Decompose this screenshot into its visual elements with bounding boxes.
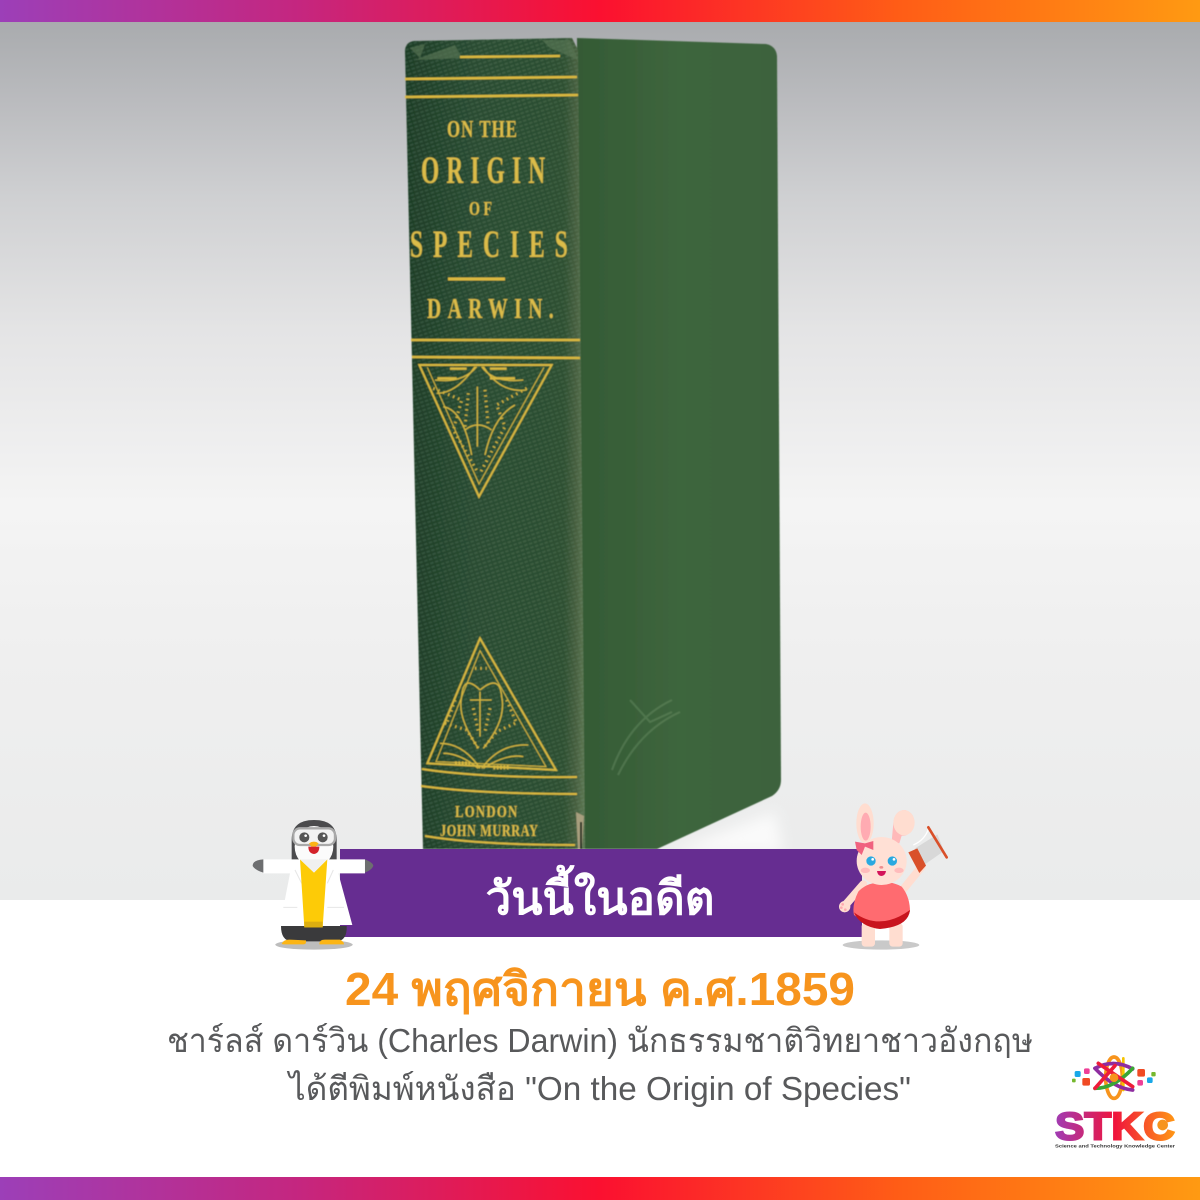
STKC logo — [1055, 1057, 1175, 1150]
description text — [167, 1022, 1033, 1107]
spine title text: OF — [469, 198, 492, 220]
banner title: วันนี้ในอดีต — [486, 864, 714, 924]
torn spine detail — [576, 812, 584, 849]
rabbit mascot with megaphone — [839, 803, 947, 950]
white lower panel — [0, 900, 1200, 1177]
gold triangle ornament top — [419, 365, 552, 497]
top gradient bar — [0, 0, 1200, 22]
spine title text: SPECIES — [410, 222, 568, 265]
spine title text: ON THE — [447, 117, 517, 143]
book: On the Origin of Species — [405, 38, 781, 849]
atom icon — [1095, 1057, 1133, 1098]
spine title text: ORIGIN — [421, 148, 545, 191]
embossed ornament on cover — [612, 700, 680, 775]
gold rules — [405, 56, 580, 845]
book spine — [405, 38, 585, 849]
bottom gradient bar — [0, 1177, 1200, 1200]
book cover side — [577, 38, 781, 849]
logo tagline: Science and Technology Knowledge Center — [1055, 1144, 1175, 1150]
spine title text: DARWIN. — [427, 294, 554, 325]
date heading: 24 พฤศจิกายน ค.ศ.1859 — [345, 963, 855, 1015]
gold triangle ornament bottom — [427, 638, 556, 770]
worn top of spine — [410, 40, 578, 60]
logo dots — [1072, 1068, 1156, 1086]
description text: ชาร์ลส์ ดาร์วิน (Charles Darwin) นักธรรมชาติวิทยาชาวอังกฤษ — [167, 1022, 1033, 1059]
photo background — [0, 22, 1200, 900]
floor reflection — [670, 812, 783, 852]
purple title banner — [340, 849, 862, 937]
description text: ได้ตีพิมพ์หนังสือ "On the Origin of Species" — [286, 1070, 911, 1107]
logo wordmark: STKC — [1055, 1104, 1175, 1148]
spine title text — [410, 117, 568, 841]
spine title text: LONDON — [455, 803, 517, 822]
spine title text: JOHN MURRAY — [440, 822, 538, 841]
penguin mascot — [253, 820, 373, 950]
